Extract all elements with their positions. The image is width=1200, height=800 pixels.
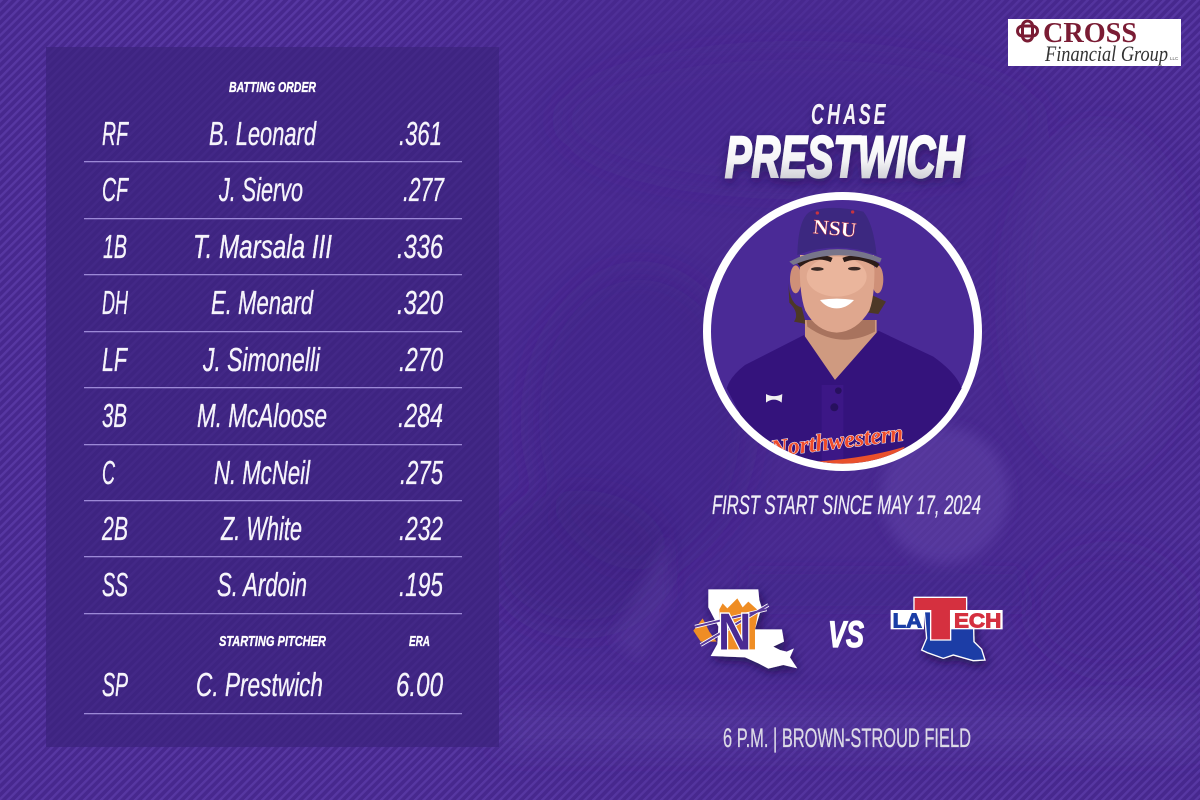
- player photo: Northwestern: [768, 421, 905, 463]
- wordmark ECH: ECH: [954, 609, 1001, 632]
- lineup row 4: [84, 284, 462, 332]
- lineup row 9: [84, 566, 462, 614]
- wordmark LA: LA: [893, 609, 922, 632]
- eyebrows and eyes: [799, 257, 878, 266]
- lineup row 6: M. McAloose: [197, 397, 327, 434]
- lineup row 2: J. Siervo: [218, 171, 303, 208]
- lineup row 6: [84, 397, 462, 445]
- lineup row 7: N. McNeil: [214, 454, 311, 491]
- lineup row 3: [84, 228, 462, 275]
- lineup row 1: B. Leonard: [209, 115, 317, 152]
- lineup row 9: SS: [102, 566, 128, 603]
- under armour mark: [766, 394, 782, 403]
- lineup row 4: DH: [102, 284, 128, 321]
- lineup row 4: .320: [397, 284, 443, 321]
- sponsor logo: Cross Financial Group: LLC: [1170, 56, 1179, 61]
- starting pitcher row: SP: [102, 666, 128, 703]
- lineup row 3: 1B: [103, 228, 127, 265]
- heading: era: ERA: [409, 634, 430, 650]
- cap logo: NSU: [812, 216, 857, 242]
- subtitle: first start: FIRST START SINCE MAY 17, 2024: [712, 490, 981, 520]
- vs label: VS: [828, 614, 864, 655]
- lineup row 3: .336: [397, 228, 443, 265]
- lineup row 7: C: [102, 454, 116, 491]
- background baseball: [881, 427, 1009, 563]
- lineup row 8: [84, 510, 462, 557]
- lineup row 9: .195: [399, 566, 443, 603]
- player photo: [707, 196, 978, 473]
- lineup row 8: .232: [399, 510, 443, 547]
- lineup row 5: [84, 341, 462, 388]
- lineup row 5: J. Simonelli: [202, 341, 321, 378]
- lineup row 2: .277: [403, 171, 445, 208]
- lineup row 6: 3B: [102, 397, 127, 434]
- lineup row 2: CF: [102, 171, 129, 208]
- lineup row 8: Z. White: [220, 510, 302, 547]
- logo: Louisiana Tech: [891, 597, 1003, 661]
- panel: batting order: [46, 47, 499, 747]
- hair: [788, 283, 886, 324]
- game time and venue: 6 P.M. | BROWN-STROUD FIELD: [723, 723, 971, 753]
- starting pitcher row: C. Prestwich: [196, 666, 323, 703]
- lineup row 5: .270: [399, 341, 443, 378]
- lineup row 7: .275: [400, 454, 443, 491]
- jersey script: [815, 447, 905, 465]
- sponsor logo: Cross Financial Group: [1008, 17, 1181, 66]
- lineup row 1: RF: [102, 115, 129, 152]
- starting pitcher row: 6.00: [396, 666, 443, 703]
- starting pitcher row: [84, 666, 462, 714]
- lineup row 2: [84, 171, 462, 219]
- ears: [790, 265, 801, 293]
- smile: [820, 299, 854, 308]
- face: [800, 255, 874, 333]
- neck: [805, 320, 877, 380]
- sponsor logo: Cross Financial Group: CROSS: [1043, 17, 1137, 49]
- lineup row 6: .284: [398, 397, 443, 434]
- sponsor logo: Cross Financial Group: Financial Group: [1044, 41, 1168, 66]
- lineup row 7: [84, 454, 462, 501]
- lineup row 4: E. Menard: [211, 284, 314, 321]
- lineup row 1: [84, 115, 462, 162]
- heading: batting order: BATTING ORDER: [229, 80, 316, 96]
- lineup row 3: T. Marsala III: [193, 228, 332, 265]
- letter N: N: [718, 602, 751, 660]
- lineup row 1: .361: [399, 115, 442, 152]
- lineup row 5: LF: [102, 341, 128, 378]
- heading: starting pitcher: STARTING PITCHER: [219, 634, 326, 650]
- player last name: PRESTWICH: [725, 125, 965, 190]
- jersey: [727, 331, 962, 473]
- cap: [797, 208, 877, 255]
- lineup row 8: 2B: [101, 510, 128, 547]
- logo: Northwestern State: [693, 589, 797, 669]
- buttons: [835, 387, 842, 394]
- player first name: CHASE: [811, 99, 886, 131]
- icon: cross knot: [1018, 21, 1038, 41]
- lineup row 9: S. Ardoin: [217, 566, 307, 603]
